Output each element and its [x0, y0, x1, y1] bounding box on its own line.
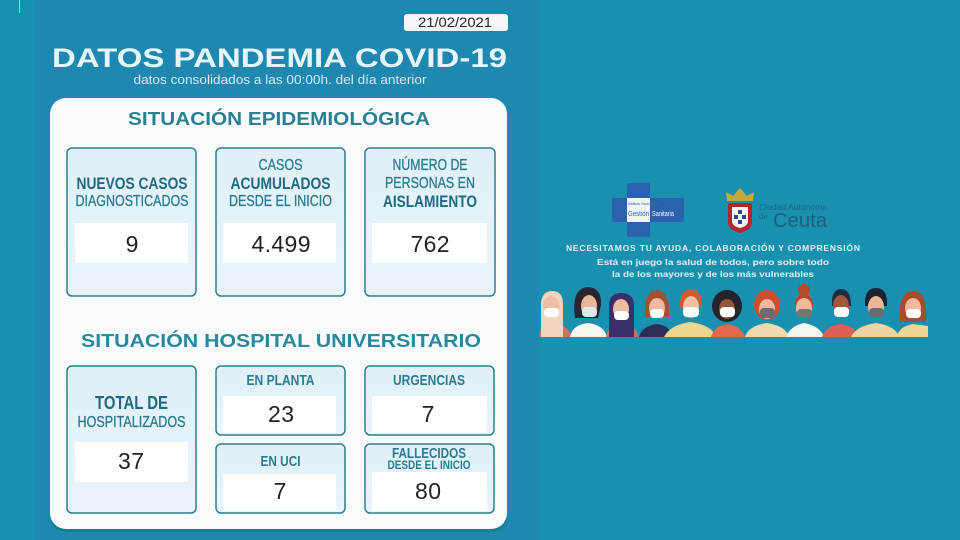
card: fallecidos: FALLECIDOS	[392, 446, 466, 462]
person 1	[539, 291, 572, 337]
card: casos acumulados: DESDE EL INICIO	[229, 193, 332, 210]
card: nuevos casos	[67, 148, 196, 296]
card: fallecidos: DESDE EL INICIO	[388, 458, 470, 472]
heading: situación hospital universitario: SITUACIÓN HOSPITAL UNIVERSITARIO	[81, 330, 481, 351]
logo: ciudad autónoma de ceuta	[726, 188, 828, 233]
card: en planta: EN PLANTA	[246, 372, 315, 389]
title: DATOS PANDEMIA COVID-19	[52, 43, 507, 73]
icon: crown	[726, 188, 754, 201]
heading: situación epidemiológica: SITUACIÓN EPIDEMIOLÓGICA	[128, 108, 430, 129]
card: en uci	[216, 444, 345, 513]
card: nuevos casos: DIAGNOSTICADOS	[76, 193, 188, 210]
person 10	[851, 288, 899, 337]
message heading: NECESITAMOS TU AYUDA, COLABORACIÓN Y COMPRENSIÓN	[566, 242, 860, 253]
message text: Está en juego la salud de todos, pero sobre todo	[597, 257, 829, 267]
card: total de hospitalizados: 37	[118, 448, 144, 474]
card: fallecidos	[365, 444, 494, 513]
logo: ciudad autónoma de ceuta: Ceuta	[773, 210, 828, 232]
card: personas en aislamiento: AISLAMIENTO	[383, 192, 477, 211]
person 11	[896, 291, 928, 337]
person 5	[664, 289, 716, 337]
subtitle: datos consolidados a las 00:00h. del día anterior	[134, 73, 426, 87]
logo: ciudad autónoma de ceuta: de	[759, 212, 768, 221]
card: casos acumulados: CASOS	[258, 157, 302, 174]
person 9	[822, 289, 857, 337]
date badge: 21/02/2021	[418, 14, 492, 30]
card: en planta	[216, 366, 345, 435]
card: personas en aislamiento	[365, 148, 495, 296]
main white panel	[50, 98, 507, 532]
card: urgencias: URGENCIAS	[393, 372, 465, 389]
illustration: masked people	[539, 284, 928, 337]
logo: gestión sanitaria cross: Sanitaria	[652, 209, 675, 218]
person 2	[570, 287, 607, 337]
message text: la de los mayores y de los más vulnerables	[612, 269, 814, 279]
logo: gestión sanitaria cross: Gestión	[628, 209, 649, 218]
card: personas en aislamiento: NÚMERO DE	[392, 157, 468, 174]
date badge	[404, 14, 508, 31]
person 6	[711, 290, 745, 337]
logo: gestión sanitaria cross	[612, 183, 684, 237]
card: fallecidos: 80	[415, 478, 441, 504]
infographic background panel	[35, 0, 538, 540]
card: total de hospitalizados: TOTAL DE	[95, 392, 168, 413]
logo: ciudad autónoma de ceuta: Ciudad Autónoma	[759, 203, 828, 212]
card: urgencias: 7	[422, 401, 434, 427]
card: casos acumulados	[216, 148, 345, 296]
person 4	[639, 290, 671, 337]
card: en uci: EN UCI	[260, 453, 300, 470]
card: nuevos casos: NUEVOS CASOS	[76, 174, 188, 193]
card: personas en aislamiento: 762	[410, 231, 450, 257]
card: casos acumulados: ACUMULADOS	[230, 174, 330, 193]
card: personas en aislamiento: PERSONAS EN	[385, 175, 475, 192]
person 8	[786, 284, 824, 337]
card: nuevos casos: 9	[126, 231, 138, 257]
card: casos acumulados: 4.499	[252, 231, 310, 257]
person 3	[606, 293, 639, 337]
card: en uci: 7	[274, 478, 286, 504]
message text	[597, 257, 829, 279]
card: en planta: 23	[268, 401, 294, 427]
card: urgencias	[365, 366, 494, 435]
person 7	[745, 290, 789, 337]
card: total de hospitalizados	[67, 366, 196, 513]
card: total de hospitalizados: HOSPITALIZADOS	[78, 414, 186, 431]
logo: gestión sanitaria cross: Instituto Nacional de	[628, 202, 660, 206]
icon: shield	[728, 203, 752, 233]
